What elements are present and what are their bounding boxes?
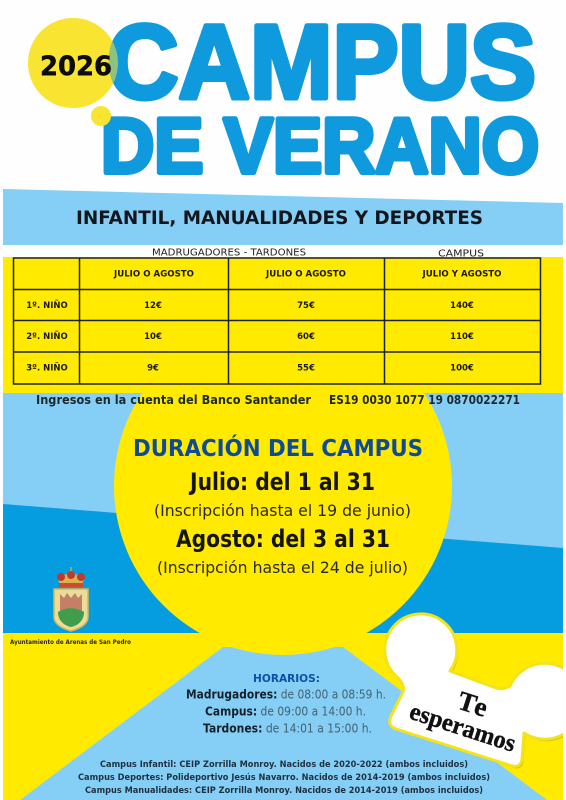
table header row: JULIO Y AGOSTO xyxy=(421,270,502,280)
label: madrugadores tardones: MADRUGADORES - TARDONES xyxy=(152,248,306,258)
callout text: Te xyxy=(454,685,493,723)
row: first child xyxy=(26,300,474,311)
price table xyxy=(13,258,541,384)
title: DE VERANO: DE VERANO xyxy=(101,102,539,190)
light blue lower background xyxy=(3,393,563,553)
bank account text: Ingresos en la cuenta del Banco Santander xyxy=(36,392,312,407)
row: first child: 140€ xyxy=(450,301,474,311)
light blue bottom trapezoid xyxy=(20,647,547,800)
row: third child xyxy=(26,362,474,374)
callout text: esperamos xyxy=(406,698,519,758)
heading: horarios: HORARIOS: xyxy=(253,672,320,685)
row: first child: 75€ xyxy=(297,301,315,311)
light blue band xyxy=(3,189,563,245)
yellow bottom background xyxy=(3,633,563,800)
small yellow dot xyxy=(91,106,111,126)
mouse-shaped callout xyxy=(385,614,566,768)
row: third child: 55€ xyxy=(297,364,315,374)
yellow table background xyxy=(3,257,563,393)
table header row xyxy=(113,270,501,280)
row: third child: 9€ xyxy=(147,364,159,374)
row: first child: 12€ xyxy=(144,301,162,311)
large yellow circle xyxy=(114,317,452,655)
bank account text xyxy=(36,392,520,407)
row: first child: 1º. NIÑO xyxy=(26,300,68,311)
schedule: Madrugadores: de 08:00 a 08:59 h. xyxy=(186,688,386,702)
municipality caption: Ayuntamiento de Arenas de San Pedro xyxy=(10,639,131,646)
locations and ages: Campus Manualidades: CEIP Zorrilla Monroy. Nacidos de 2014-2019 (ambos incluidos) xyxy=(85,786,483,796)
dates: julio: Julio: del 1 al 31 xyxy=(188,468,375,496)
row: third child: 100€ xyxy=(450,364,474,374)
schedule: Campus: de 09:00 a 14:00 h. xyxy=(205,704,366,718)
locations and ages xyxy=(78,760,490,796)
row: second child: 60€ xyxy=(297,332,315,342)
dates: agosto: Agosto: del 3 al 31 xyxy=(176,525,390,553)
row: second child: 2º. NIÑO xyxy=(26,331,68,342)
deadline: agosto: (Inscripción hasta el 24 de julio) xyxy=(157,558,408,577)
label: campus: CAMPUS xyxy=(438,248,484,260)
year badge disc xyxy=(28,18,118,108)
row: third child: 3º. NIÑO xyxy=(26,362,68,374)
table header row: JULIO O AGOSTO xyxy=(265,270,346,280)
row: second child: 10€ xyxy=(144,332,162,342)
schedule xyxy=(186,688,386,736)
icon: municipal crest xyxy=(54,567,88,631)
locations and ages: Campus Deportes: Polideportivo Jesús Navarro. Nacidos de 2014-2019 (ambos incluidos) xyxy=(78,773,490,783)
dark blue slanted band xyxy=(3,504,563,633)
year badge overlay and number xyxy=(28,18,118,108)
row: second child: 110€ xyxy=(450,332,474,342)
schedule: Tardones: de 14:01 a 15:00 h. xyxy=(203,722,372,736)
title: CAMPUS: CAMPUS xyxy=(107,4,536,121)
year badge overlay and number: 2026 xyxy=(40,51,112,82)
table header row: JULIO O AGOSTO xyxy=(113,270,194,280)
deadline: julio: (Inscripción hasta el 19 de junio) xyxy=(154,501,411,520)
bank account text: ES19 0030 1077 19 0870022271 xyxy=(329,392,520,407)
subtitle: INFANTIL, MANUALIDADES Y DEPORTES xyxy=(76,208,483,229)
heading: duración: DURACIÓN DEL CAMPUS xyxy=(133,434,423,462)
row: second child xyxy=(26,331,474,342)
locations and ages: Campus Infantil: CEIP Zorrilla Monroy. Nacidos de 2020-2022 (ambos incluidos) xyxy=(100,760,468,770)
